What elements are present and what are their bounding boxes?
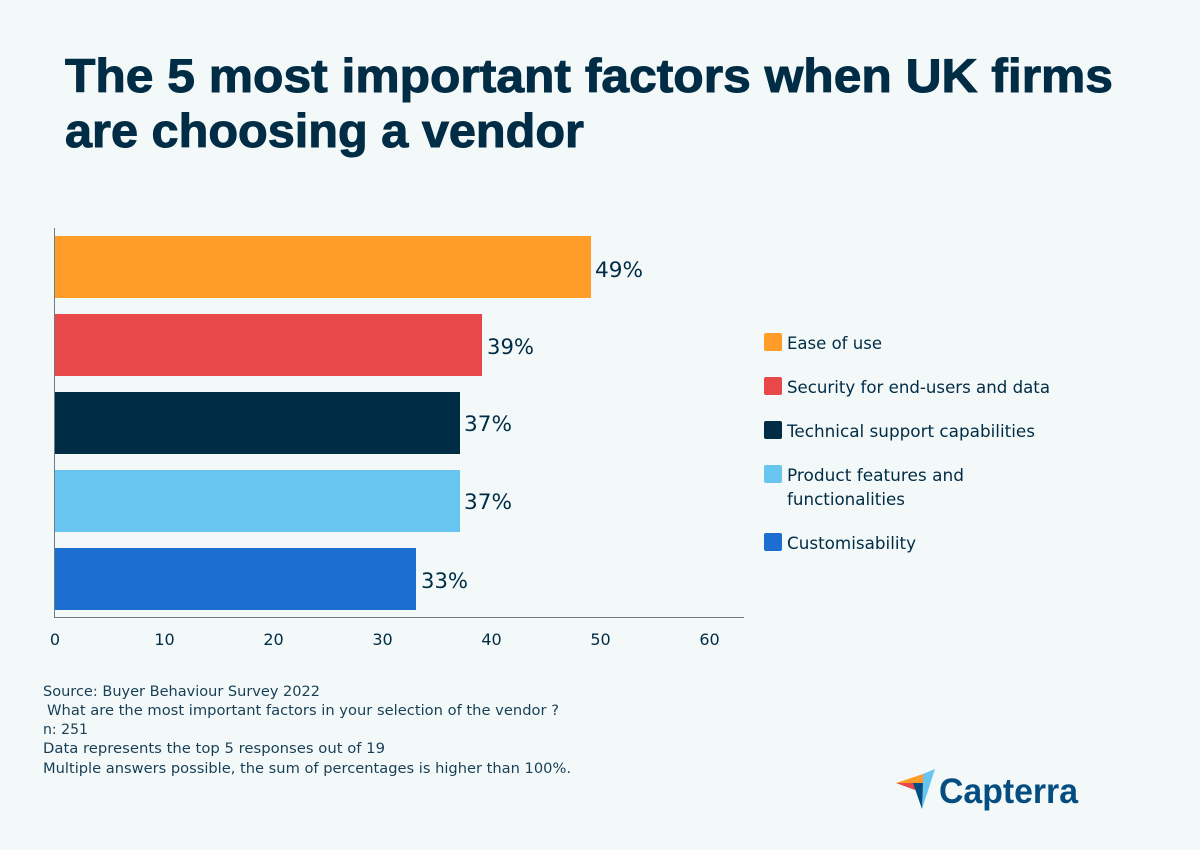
- source notes: n: 251: [43, 722, 88, 738]
- source notes: Data represents the top 5 responses out of 19: [43, 741, 385, 757]
- legend item: technical support: Technical support capabilities: [786, 422, 1035, 442]
- x-axis labels: 10: [154, 630, 175, 649]
- bar: technical support 37%: [55, 392, 512, 454]
- logo: Capterra: [896, 769, 1079, 811]
- legend: [764, 333, 1050, 554]
- x-axis labels: 50: [590, 630, 611, 649]
- title: [65, 50, 1113, 158]
- bar: security 39%: 39%: [487, 335, 534, 359]
- bar: customisability 33%: [55, 548, 468, 610]
- x-axis labels: 40: [481, 630, 502, 649]
- chart axes: [54, 228, 744, 618]
- x-axis labels: 20: [263, 630, 284, 649]
- x-axis labels: [50, 630, 720, 649]
- x-axis labels: 60: [699, 630, 720, 649]
- bar: security 39%: [55, 314, 534, 376]
- bar: product features 37%: 37%: [464, 490, 512, 514]
- legend item: product features: Product features and: [787, 466, 964, 486]
- source notes: [43, 684, 571, 777]
- legend item: ease of use: Ease of use: [787, 334, 882, 354]
- bar chart: [50, 228, 744, 649]
- bar: ease of use 49%: [55, 236, 643, 298]
- legend item: product features: [764, 465, 964, 510]
- bar: customisability 33%: 33%: [421, 569, 468, 593]
- source notes: Source: Buyer Behaviour Survey 2022: [43, 684, 320, 700]
- legend item: product features: functionalities: [787, 490, 905, 510]
- title: are choosing a vendor: [65, 105, 584, 158]
- legend item: security: Security for end-users and data: [787, 378, 1050, 398]
- bar: product features 37%: [55, 470, 512, 532]
- legend item: customisability: Customisability: [787, 534, 916, 554]
- bar: ease of use 49%: 49%: [595, 258, 643, 282]
- title: The 5 most important factors when UK firms: [65, 50, 1113, 103]
- source notes: Multiple answers possible, the sum of percentages is higher than 100%.: [43, 761, 571, 777]
- logo: Capterra: Capterra: [939, 772, 1079, 811]
- source notes: What are the most important factors in your selection of the vendor ?: [47, 703, 559, 719]
- icon: Capterra arrow: [896, 769, 935, 809]
- x-axis labels: 30: [372, 630, 393, 649]
- x-axis labels: 0: [50, 630, 60, 649]
- bar: technical support 37%: 37%: [464, 412, 512, 436]
